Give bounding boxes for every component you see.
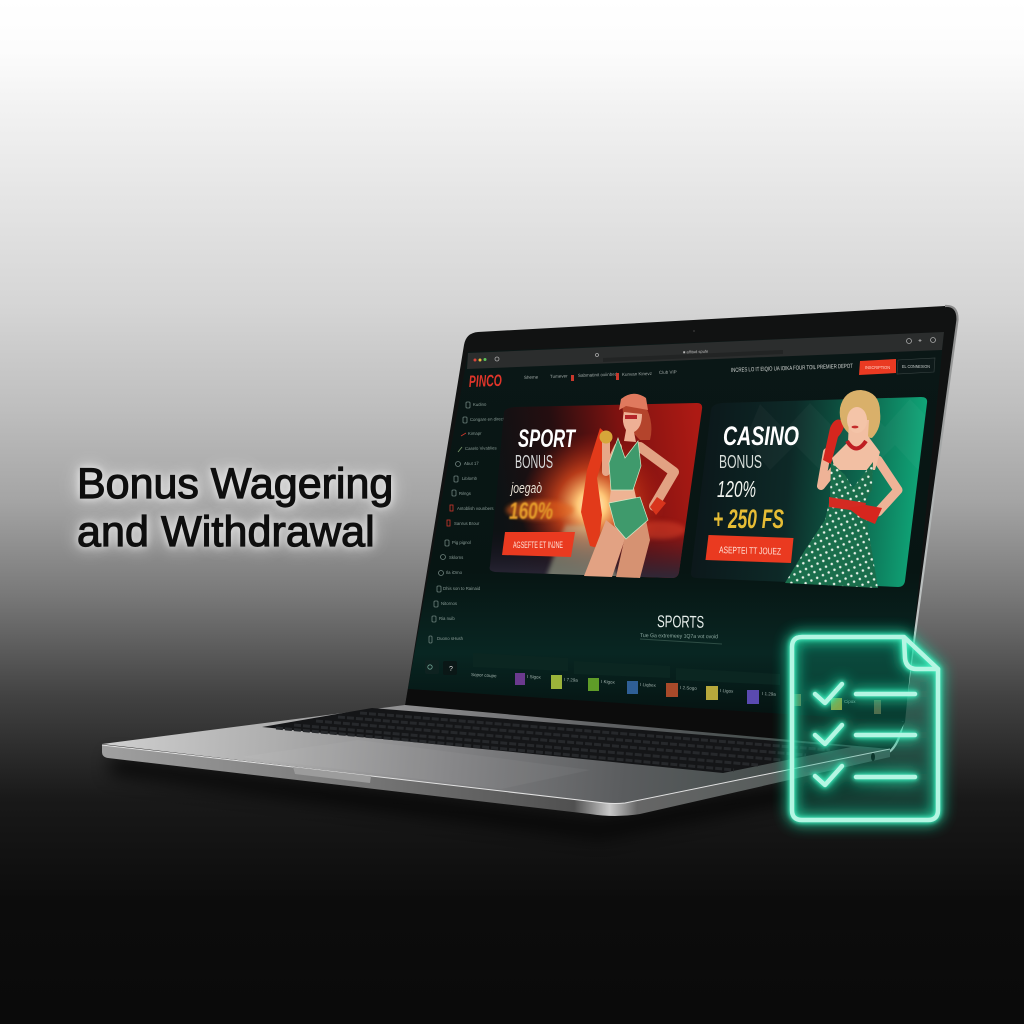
sunglasses: [625, 415, 637, 419]
stadium glow: [490, 436, 686, 578]
header navigation: Tumever: [550, 373, 568, 379]
browser icons: [495, 338, 936, 361]
ribbon: [581, 428, 609, 548]
right arm: [640, 447, 674, 506]
percent offer: 120%: [717, 476, 756, 502]
glove: [650, 497, 666, 515]
sports section heading: SPORTS: [657, 612, 704, 632]
left arm: [606, 442, 618, 472]
header navigation: Club VIP: [659, 369, 677, 375]
cta button: [502, 532, 575, 557]
site header: [469, 358, 935, 391]
necklace: [847, 441, 866, 448]
sidebar menu: Dhis son to Rainaid: [443, 586, 481, 591]
sidebar icons: [429, 402, 470, 643]
sidebar menu: Caselo Vivablies: [465, 445, 497, 451]
thumbnail captions: I 7.29a: [564, 677, 578, 683]
login button: [897, 358, 935, 374]
thumbnail captions: Sopor coupe: [471, 672, 497, 678]
headphone jack: [871, 753, 875, 761]
browser bar: [467, 332, 944, 369]
laptop: [102, 306, 958, 838]
sidebar menu: Liblomb: [462, 476, 478, 481]
face: [847, 407, 867, 433]
window controls: [474, 358, 486, 362]
hair: [840, 390, 880, 438]
thumbnail captions: I Kigox: [601, 679, 616, 685]
diamond pattern: [745, 399, 925, 470]
keyboard: [262, 708, 851, 773]
thumbnail captions: [471, 672, 856, 704]
inner glow: [792, 637, 938, 820]
red glove raised: [823, 420, 844, 464]
cta button: AGSEFTE ET INJNE: [513, 540, 563, 551]
polka dot dress: [785, 462, 878, 588]
card background: [691, 397, 927, 587]
trackpad: [240, 740, 590, 789]
cta button: [706, 535, 794, 563]
thumbnail captions: I Ligox: [720, 688, 734, 694]
address field: [603, 350, 783, 362]
crop top: [609, 438, 641, 490]
login button: EL CONNEXION: [902, 364, 930, 369]
bonus label: BONUS: [515, 452, 553, 472]
bonus label: BONUS: [719, 452, 762, 472]
address text: ■ affitud spufe: [683, 349, 709, 354]
belt: [829, 497, 866, 512]
sidebar menu: Kimapr: [468, 431, 482, 436]
thumbnail captions: I Sigox: [527, 674, 542, 680]
document tint: [792, 637, 938, 820]
title: [71, 460, 400, 556]
header navigation: Sheme: [524, 374, 539, 380]
free spins offer: + 250 FS: [713, 504, 784, 534]
hair: [622, 404, 651, 440]
title: and Withdrawal: [77, 508, 375, 556]
document outline: [792, 637, 938, 820]
sign-up button: [859, 359, 896, 375]
offer percent: 160%: [509, 498, 553, 525]
card background: [490, 403, 702, 578]
medal: [600, 430, 612, 444]
sidebar menu: Antoblish vounbers: [457, 506, 494, 511]
raised arm: [821, 452, 840, 486]
shorts: [609, 497, 648, 539]
checklist row 2: [815, 725, 915, 744]
outer glow: [792, 637, 938, 820]
casino woman illustration: [785, 390, 898, 588]
sidebar menu: Pig pignol: [452, 540, 471, 545]
lid silver rim: [889, 306, 958, 752]
title: Bonus Wagering: [77, 460, 393, 508]
right arm: [878, 460, 898, 512]
red glove: [848, 505, 882, 524]
sidebar menu: Abut 17: [464, 461, 479, 466]
sidebar menu: Sklorns: [449, 555, 463, 560]
checklist row 1: [815, 684, 915, 703]
sidebar menu: [437, 402, 505, 641]
casino heading: CASINO: [723, 421, 799, 451]
Pinco logo: PINCO: [469, 372, 502, 391]
casino bonus card: [691, 390, 927, 588]
sidebar menu: Kudino: [473, 402, 487, 407]
promo text: INCRES LO IT EIQIO UA IOIKA FOUR TOIL PREMIER DEPOT: [731, 364, 853, 374]
thumbnail captions: I Liqbex: [640, 682, 657, 688]
sidebar menu: Ila iOmo: [446, 570, 463, 575]
sign-up button: INSCRIPTION: [865, 365, 890, 370]
header icons: [571, 373, 619, 381]
sidebar menu: Sanrus Brour: [454, 521, 480, 526]
neck and face: [623, 412, 642, 442]
thumbnail captions: I 1.29a: [762, 691, 776, 697]
sport bonus card: [488, 394, 705, 580]
sidebar menu: Rilngs: [459, 491, 471, 496]
laptop display: [408, 332, 944, 722]
screen bottom bezel: [405, 689, 905, 750]
laptop shadow: [110, 755, 880, 838]
key rows: [276, 713, 830, 770]
lips: [852, 426, 858, 428]
sport heading: SPORT: [518, 425, 577, 453]
webcam: [693, 330, 695, 332]
torso: [609, 488, 637, 505]
sport woman illustration: [581, 394, 674, 578]
laptop lid: [405, 306, 958, 752]
neck and shoulders: [832, 420, 880, 470]
sidebar footer buttons: [425, 660, 457, 675]
sidebar menu: Duono sHush: [437, 636, 464, 641]
laptop base: [102, 705, 890, 816]
game thumbnails row: [471, 672, 881, 714]
front notch: [293, 767, 371, 783]
sidebar menu: Nitornos: [441, 601, 457, 606]
front edge highlight: [102, 745, 890, 804]
sports subheading: Tue Ga extremeey 1Q7a vot ovoid: [640, 633, 718, 640]
header navigation: Sabmatinit oxiinbed: [578, 372, 618, 378]
section divider: [640, 639, 722, 644]
neon checklist document icon: [792, 637, 938, 820]
sidebar menu: Congare en direct: [470, 416, 505, 422]
sidebar menu: Ria nuib: [439, 616, 455, 621]
sidebar footer buttons: ?: [449, 666, 453, 673]
base front face: [102, 745, 890, 816]
cta button: ASEPTEI TT JOUEZ: [719, 545, 781, 558]
base top deck: [102, 705, 890, 804]
thumbnail captions: Cipox: [844, 699, 856, 704]
sun visor: [619, 394, 648, 410]
checklist row 3: [815, 766, 915, 785]
legs: [584, 520, 626, 577]
offer line: joegaò: [510, 480, 542, 497]
thumbnail captions: I 2.Sogo: [680, 685, 697, 691]
header navigation: Kunvan Kinevz: [622, 371, 653, 377]
header navigation: [524, 369, 677, 380]
score panels: [473, 653, 780, 685]
